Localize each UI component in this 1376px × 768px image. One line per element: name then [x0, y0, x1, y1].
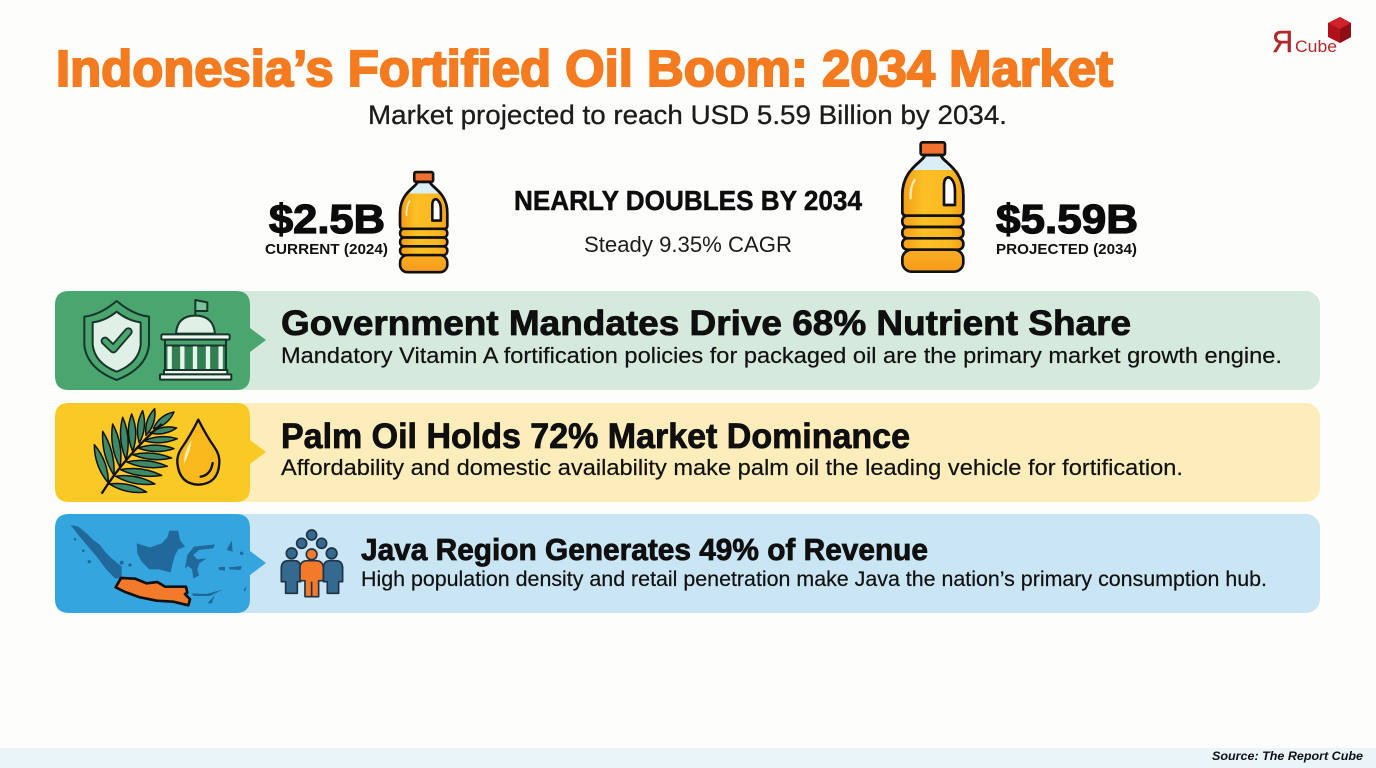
heading: Palm Oil Holds 72% Market Dominance [281, 417, 910, 456]
icon: oil drop [177, 420, 219, 485]
description: Affordability and domestic availability make palm oil the leading vehicle for fortification. [281, 455, 1183, 480]
icon: people group [281, 530, 343, 597]
callout: nearly doubles: NEARLY DOUBLES BY 2034 [514, 185, 862, 216]
heading: Java Region Generates 49% of Revenue [361, 532, 928, 567]
stat: projected value: PROJECTED (2034) [996, 241, 1137, 258]
panel: java region [55, 514, 1320, 613]
subtitle: Market projected to reach USD 5.59 Billion by 2034. [368, 100, 1007, 130]
icon: government building [160, 300, 231, 380]
logo: Я [1272, 24, 1293, 59]
panel: palm oil [55, 403, 1320, 502]
description: Mandatory Vitamin A fortification policies for packaged oil are the primary market growth engine. [281, 343, 1282, 368]
logo [1272, 17, 1351, 59]
stat: current value: $2.5B [269, 196, 385, 242]
description: High population density and retail penetration make Java the nation’s primary consumption hub. [361, 568, 1267, 591]
stat: current value: CURRENT (2024) [265, 241, 388, 258]
logo: Cube [1295, 38, 1337, 56]
stat: projected value: $5.59B [996, 196, 1138, 242]
footer bar: Source: The Report Cube [1212, 749, 1363, 763]
icon: shield with check [84, 301, 149, 380]
icon: small oil bottle [400, 172, 447, 272]
panel: government mandates [55, 291, 1320, 390]
stat: projected value [996, 196, 1138, 258]
stat: current value [265, 196, 388, 258]
callout: nearly doubles: Steady 9.35% CAGR [584, 232, 792, 257]
icon: indonesia map [71, 525, 247, 605]
title: Indonesia’s Fortified Oil Boom: 2034 Market [56, 40, 1113, 97]
icon: palm frond [94, 409, 177, 494]
icon: large oil bottle [902, 142, 963, 272]
heading: Government Mandates Drive 68% Nutrient Share [281, 304, 1131, 343]
footer bar [0, 748, 1376, 768]
callout: nearly doubles [514, 185, 862, 257]
